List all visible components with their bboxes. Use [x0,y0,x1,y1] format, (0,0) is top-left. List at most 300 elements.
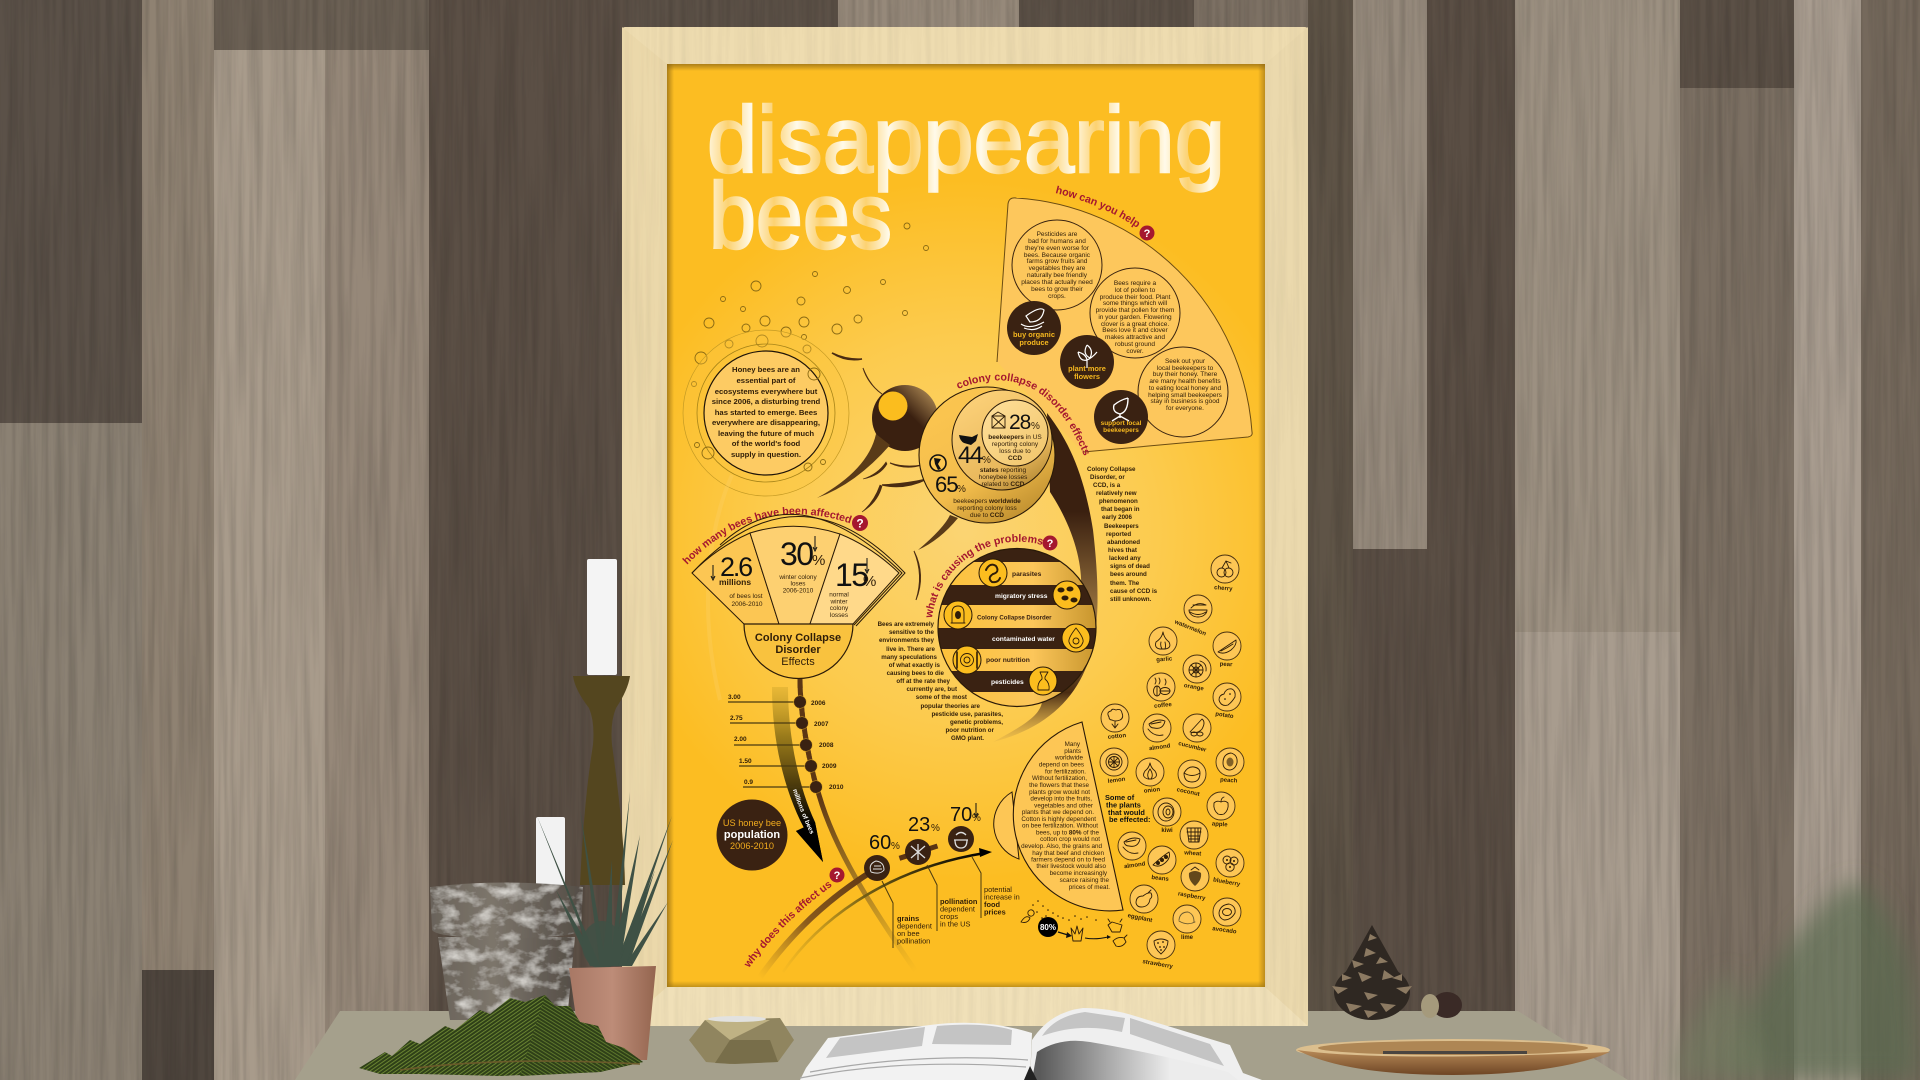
pine branch [359,995,643,1076]
stat: 65% [935,472,1021,519]
text: plant dependence: plants grow would not [1029,789,1090,796]
heading: what is causing the problems [926,534,1043,618]
icon: kiwi: kiwi [1161,828,1173,834]
stat: 60% grains [864,832,932,948]
icon: question mark [852,515,868,531]
row: pesticides [991,667,1057,695]
black arrow: millions of bees: millions of bees [793,789,814,834]
stat: 65%: reporting colony loss [957,505,1018,512]
faint stem [708,475,732,700]
bowl: colony collapse disorder effects: Colony Collapse [755,632,841,644]
stat: 44%: % [982,455,991,466]
icon: coffee: coffee [1154,702,1173,710]
help circle: flowers: Bees require a [1114,280,1157,287]
text: causes description: Bees are extremely [878,621,935,628]
badge: support local beekeepers [1094,390,1148,444]
title: bees [709,163,892,268]
row: contaminated water [992,624,1090,652]
candle and wooden holder [573,559,630,885]
icon: lemon: lemon [1107,777,1126,785]
stat: 28%: beekeepers in US [988,434,1042,441]
text: some of the plants: Some of [1105,793,1135,802]
icon: blueberry [1213,849,1244,888]
timeline stem [800,680,917,973]
icon: cherry: cherry [1214,585,1233,593]
help circle: beekeepers: stay in business is good [1150,398,1220,405]
icon: cherry [1211,555,1239,593]
geometric tealight [689,1016,794,1064]
data: 2006: 2006 [811,700,826,707]
icon: apple [1207,792,1235,829]
text: causes description: poor nutrition or [946,727,995,734]
row: parasites: parasites [1012,571,1042,578]
stat: 15%: losses [830,612,848,619]
icon: peach [1216,748,1244,785]
text: ccd description: Beekeepers [1104,523,1139,530]
icon: watermelon: watermelon [1173,619,1207,638]
text: causes description: environments they [879,637,935,644]
stat: 23% pollination: in the US [940,920,970,928]
text: some of the plants: that would [1108,808,1145,817]
icon: blueberry: blueberry [1213,877,1241,888]
text: plant dependence: depend on bees [1039,762,1084,768]
heading: how many bees have been affected [682,507,852,564]
stat: 65%: % [957,484,966,495]
text: causes description: genetic problems, [950,719,1003,726]
icon: wheat: wheat [1183,850,1201,858]
help circle: beekeepers: local beekeepers to [1157,365,1214,372]
bowl: colony collapse disorder effects [744,624,853,678]
row: migratory stress: migratory stress [995,593,1048,600]
fan chart [692,514,905,626]
text: plant dependence: for fertilization. [1045,768,1086,776]
data: 2007: 2.75 [730,715,743,722]
80% food chain: 80% [1040,923,1056,932]
help circle: flowers: cover. [1126,348,1144,355]
row: parasites [979,559,1042,587]
text: ccd description: CCD, is a [1093,482,1121,489]
text: ccd description: phenomenon [1099,498,1138,505]
stat: 70% food prices [948,803,1020,918]
stat: 44%: honeybee losses [979,474,1028,481]
help circle: beekeepers: buy their honey. There [1153,371,1218,378]
text: plant dependence: plants that we depend on. [1022,809,1094,816]
icon: cucumber [1178,714,1211,754]
icon: usa map [959,434,978,445]
icon: question mark: ? [1144,228,1151,240]
text: causes description: popular theories are [920,703,981,710]
icon: question mark: ? [856,516,864,530]
frame [622,27,1308,1026]
row: colony collapse disorder: Colony Collapse Disorder [977,614,1052,622]
icon: globe [930,455,946,471]
bee head, antennae and legs [817,353,958,600]
help circle: flowers: produce their food. Plant [1100,294,1171,301]
icon: almond: almond [1124,861,1146,870]
intro circle: everywhere are disappearing, [712,418,820,427]
heading: how can you help: how can you help [1056,186,1140,228]
stat: 60% grains: pollination [897,936,930,946]
stat: 30%: 30 [780,536,813,572]
icon: cucumber: cucumber [1178,741,1207,754]
help circle: beekeepers: to eating local honey and [1149,385,1222,392]
help circle: organic: bees to grow their [1031,286,1084,293]
icon: question mark [1042,536,1058,550]
icon: orange: orange [1183,683,1205,693]
text: ccd description: cause of CCD is [1110,588,1158,595]
intro circle: since 2006, a disturbing trend [712,397,821,406]
striped abdomen [938,548,1096,708]
arc [760,868,877,977]
data: 2010 [743,779,844,793]
bowl: colony collapse disorder effects: Effects [781,656,815,668]
stat: 28% [988,411,1042,462]
icon: lime: lime [1181,935,1194,941]
icon: eggplant [1127,885,1158,924]
help circle: organic: they're even worse for [1025,245,1090,252]
stat: 15%: colony [830,605,849,612]
data: 2010: 0.9 [744,779,753,786]
stat: 44%: related to CCD [981,481,1025,488]
help circle: flowers: lot of pollen to [1115,287,1156,294]
help circle: beekeepers: Seek out your [1165,358,1206,365]
text: plant dependence: cotton crop would not [1040,836,1100,843]
stat: 15%: % [863,573,876,590]
text: plant dependence: Many [1065,741,1081,748]
panel: how can you help [996,186,1253,452]
stat: 44%: states reporting [980,467,1027,474]
stat: 70% food prices: food [984,900,1000,909]
stat: 60% grains: on bee [897,929,920,938]
stat: 70% food prices: prices [984,908,1006,916]
icon: almond [1118,832,1146,870]
data: 2008 [734,736,834,751]
text: plant dependence: Without fertilization, [1032,775,1087,782]
pine cone [1332,925,1412,1020]
stat: 23% pollination: crops [940,912,958,921]
icon: coconut [1176,760,1206,798]
icon: pear [1213,632,1241,668]
row: contaminated water: contaminated water [992,636,1055,643]
text: ccd description: still unknown. [1110,596,1152,603]
data: 2008: 2.00 [734,736,747,743]
panel: us honey bee population timeline [716,679,910,962]
text: some of the plants [1105,793,1150,824]
icon: strawberry [1142,931,1175,970]
text: plant dependence: farmers depend on to feed [1031,856,1105,864]
stat: 30%: % [812,552,825,569]
stat: 23% pollination: pollination [940,897,978,906]
text: plant dependence: vegetables and other [1034,802,1093,810]
panel: what is causing the problems [926,534,1097,708]
text: causes description [878,621,1003,742]
data: 2009: 2009 [822,763,837,770]
help circle: flowers: in your garden. Flowering [1098,314,1172,321]
row: pesticides: pesticides [991,679,1024,686]
stat: 2.6 millions: of bees lost [729,593,763,600]
text: plant dependence: on bee fertilization. Without [1022,822,1098,830]
text: plant dependence: prices of meat. [1069,884,1110,891]
text: ccd description: reported [1106,531,1131,538]
help circle: flowers: robust ground [1115,341,1155,348]
bee abdomen tail swoosh [993,413,1098,742]
icon: coffee [1147,673,1175,710]
terracotta pot with plant [537,792,673,1060]
stat: 28%: 28 [1009,411,1031,434]
text: some of the plants: the plants [1106,800,1141,810]
callout: population: US honey bee [723,818,781,828]
icon: apple: apple [1212,821,1228,829]
badge: plant more flowers: plant more [1068,364,1106,373]
text: ccd description: them. The [1110,580,1140,587]
stat: 23% pollination: dependent [940,904,975,914]
black arrow: millions of bees [772,687,823,862]
icon: avocado [1212,898,1241,936]
text: plant dependence: develop into the fruits, [1030,796,1092,802]
stat: 60% grains: grains [897,914,919,923]
help circle: flowers: provide that pollen for them [1096,307,1174,314]
stat: 30%: winter colony [778,574,817,581]
help circle: organic: naturally bee friendly [1027,272,1088,279]
stat: 44% [958,442,1028,488]
stat: 70% food prices: % [972,813,981,824]
text: plant dependence: become increasingly [1050,870,1108,877]
text: causes description: GMO plant. [951,735,984,742]
help circle: flowers: Bees love it and clover [1102,327,1169,334]
stat: 70% food prices: 70 [950,804,972,826]
callout: population: population [724,829,780,841]
data: 2007: 2007 [814,721,829,728]
icon: watermelon [1173,595,1212,638]
help circle: organic: farms grow fruits and [1027,258,1088,265]
data: 2009: 1.50 [739,758,752,765]
icon: coconut: coconut [1176,787,1200,798]
stat: 65%: due to CCD [970,512,1004,519]
stat: 30% [778,536,825,594]
help circle: organic: Pesticides are [1037,231,1078,238]
icon: peach: peach [1220,777,1238,785]
text: ccd description: signs of dead [1110,563,1150,570]
badge: support local beekeepers: support local [1101,420,1142,427]
short candle [536,817,565,885]
badge: support local beekeepers: beekeepers [1103,427,1139,434]
icon: raspberry [1177,863,1209,902]
stat: 15%: winter [829,598,848,606]
intro circle: supply in question. [731,450,801,459]
intro circle: has started to emerge. Bees [715,408,817,417]
intro circle: of the world's food [732,439,801,448]
help circle: beekeepers: helping small beekeepers [1148,392,1223,399]
stat: 28%: loss due to [999,448,1031,455]
row: poor nutrition: poor nutrition [986,657,1030,664]
stat: 70% food prices: increase in [984,892,1020,902]
text: ccd description: bees around [1110,571,1147,578]
row: migratory stress [995,581,1081,609]
help circle: beekeepers [1138,347,1228,437]
text: causes description: sensitive to the [889,629,935,636]
stat: 65%: 65 [935,472,958,497]
data: 2010: 2010 [829,784,844,791]
title: disappearing [707,87,1225,192]
title [707,87,1225,268]
text: ccd description: abandoned [1107,539,1140,546]
stat: 23% pollination [905,814,978,931]
text: causes description: some of the most [916,694,967,701]
gray stone pot [430,882,583,1020]
stat: 2.6 millions: 2.6 [720,552,752,582]
help circle: organic: crops. [1048,293,1066,300]
icon: cotton: cotton [1108,733,1127,741]
text: ccd description: lacked any [1109,555,1141,562]
text: ccd description: early 2006 [1102,514,1132,521]
help circle: beekeepers: for everyone. [1166,405,1204,412]
icon: cotton [1101,704,1129,741]
text: causes description: causing bees to die [887,670,945,677]
stat: 65%: beekeepers worldwide [953,498,1021,505]
intro circle [683,330,849,496]
stat: 23% pollination: 23 [908,814,930,836]
data: 2006: 3.00 [728,694,741,701]
help circle: flowers: clover is a great choice. [1101,321,1169,328]
poster [667,64,1265,987]
wooden dish [1296,1039,1610,1075]
icon: question mark: ? [834,870,841,882]
text: plant dependence: their livestock would also [1036,863,1106,870]
stat: 60% grains: 60 [869,832,891,854]
stat: 15% [829,557,876,619]
bubbles [692,223,928,386]
icon: eggplant: eggplant [1127,913,1153,924]
text: ccd description: relatively new [1096,490,1137,497]
data: 2006 [728,694,826,708]
help circle: flowers [1090,268,1180,358]
panel: plants and pollination [994,555,1244,970]
text: causes description: many speculations [881,654,938,661]
intro circle: ecosystems everywhere but [715,387,818,396]
icon: lime [1173,905,1201,941]
icon: onion [1136,758,1164,795]
text: ccd description: Colony Collapse [1087,466,1136,473]
panel: how many bees have been affected [682,507,906,680]
icon: almond: almond [1149,743,1171,752]
intro circle: essential part of [737,376,796,385]
icon: hive [992,412,1005,428]
stat: 28%: % [1031,421,1040,432]
icon: potato [1213,683,1241,720]
heading: why does this affect us [744,882,832,967]
icon: onion: onion [1144,787,1161,795]
data: 2007 [730,715,829,729]
text: causes description: of what exactly is [889,662,941,669]
stat: 2.6 millions [711,552,763,608]
help circle: flowers: makes attractive and [1105,334,1165,341]
icon: almond [1143,714,1171,752]
icon: orange [1183,655,1211,693]
stat: 44%: 44 [958,442,983,469]
badge: buy organic produce [1007,301,1061,355]
callout: population: 2006-2010 [730,841,774,851]
help circle: organic: vegetables they are [1029,265,1086,272]
icon: raspberry: raspberry [1177,891,1206,902]
icon: wheat [1180,821,1208,858]
text: plant dependence: develop. Also, the grains and [1021,843,1102,850]
stat: 28%: CCD [1008,455,1022,462]
text: ccd description: that began in [1101,506,1140,513]
row: poor nutrition [953,646,1030,674]
stat: 15%: 15 [835,557,868,593]
text: plant dependence: the flowers that these [1029,782,1089,789]
text: plant dependence: hay that beef and chicken [1032,850,1104,857]
icon: pear: pear [1220,662,1233,668]
stat: 28%: reporting colony [992,441,1039,448]
icon: lemon [1100,748,1128,785]
stat: 2.6 millions: millions [719,577,751,587]
text: plant dependence: Cotton is highly dependent [1021,816,1096,823]
badge: buy organic produce: buy organic [1013,330,1055,339]
icon: garlic [1149,627,1177,664]
icon: strawberry: strawberry [1142,959,1174,970]
intro circle: Honey bees are an [732,365,800,374]
panel: why does this affect us [744,803,1020,974]
text: plant dependence: bees, up to 80% of the [1036,830,1099,836]
data: 2008: 2008 [819,742,834,749]
icon: beans [1148,846,1176,883]
acorn [1421,992,1462,1018]
icon: potato: potato [1215,712,1234,720]
arc arrow [783,848,992,972]
badge: plant more flowers: flowers [1074,372,1100,381]
text: some of the plants: be effected: [1109,815,1150,824]
badge: buy organic produce: produce [1019,338,1049,347]
text: causes description: pesticide use, parasites, [931,711,1003,718]
help circle: beekeepers: are many health benefits [1149,378,1221,385]
panel: colony collapse disorder effects [918,373,1089,524]
stat: 23% pollination: % [931,823,940,834]
help circle: organic: places that actually need [1021,279,1093,286]
stat: 15%: normal [829,592,849,598]
data: 2009 [739,758,837,772]
icon: question mark: ? [1047,538,1054,550]
heading: colony collapse disorder effects: colony collapse disorder effects [957,373,1089,456]
badge: plant more flowers [1060,335,1114,389]
blurred foreground plant [1670,883,1920,1080]
text: ccd description [1087,466,1158,603]
icon: question mark [830,868,844,882]
help circle: organic: bad for humans and [1028,238,1086,245]
callout: population [716,800,788,870]
stat: 60% grains: dependent [897,922,932,930]
text: plant dependence [1021,741,1110,891]
stat: 70% food prices: potential [984,885,1012,894]
stat: 30%: loses [791,580,805,588]
bowl: colony collapse disorder effects: Disorder [775,644,821,656]
text: plant dependence: plants [1064,748,1081,755]
icon: beans: beans [1151,875,1170,883]
text: ccd description: hives that [1108,547,1137,554]
text: plant dependence: scarce raising the [1060,877,1109,884]
icon: avocado: avocado [1212,926,1237,936]
80% food chain [1021,900,1127,946]
intro circle: leaving the future of much [718,429,814,438]
help circle: organic: bees. Because organic [1024,252,1091,259]
help circle: organic [1012,220,1102,310]
icon: garlic: garlic [1156,656,1173,664]
text: causes description: off at the rate they [896,678,951,685]
help circle: flowers: some things which will [1103,300,1168,307]
icon: question mark [1140,226,1154,240]
open book [800,1008,1262,1080]
text: ccd description: Disorder, or [1090,474,1125,481]
